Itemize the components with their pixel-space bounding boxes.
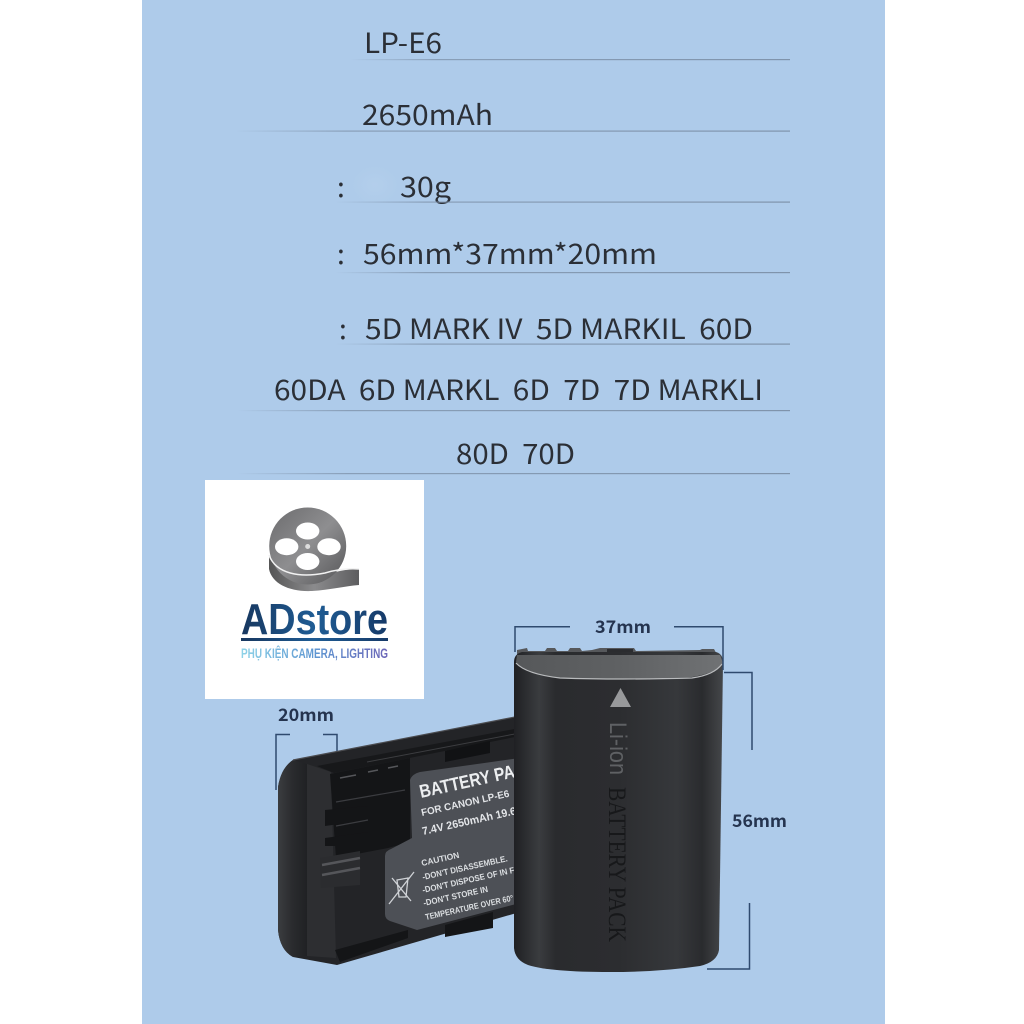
spec row: compatible cameras line 2: 60DA 6D MARKL 6D 7D 7D MARKLI xyxy=(274,369,763,409)
battery case xyxy=(278,716,520,965)
spec row: compatible cameras line 3: 80D 70D xyxy=(456,433,575,473)
spec row: weight xyxy=(335,166,790,206)
spec row: compatible cameras line 1: 5D MARK IV 5D MARKIL 60D xyxy=(365,308,753,348)
label caution text: TEMPERATURE OVER 60° xyxy=(424,893,515,922)
icon: film reel xyxy=(269,508,359,591)
embossed text: Li-ion: Li-ion xyxy=(604,722,631,775)
label caution text: -DON'T DISASSEMBLE. xyxy=(421,853,508,882)
label caution text: -DON'T DISPOSE OF IN F xyxy=(421,865,515,895)
right battery: front view xyxy=(514,648,723,972)
spec row: weight: 30g xyxy=(400,166,451,206)
dimension: 56mm: 56mm xyxy=(732,807,787,832)
spec row: dimensions: : xyxy=(337,233,345,273)
label caution text: -DON'T STORE IN xyxy=(422,884,489,908)
logo tagline: PHỤ KIỆN CAMERA, LIGHTING xyxy=(241,646,388,661)
left battery: rear view with label xyxy=(278,716,520,965)
spec row: model: LP-E6 xyxy=(364,22,442,62)
label heading: BATTERY PA xyxy=(417,760,517,802)
top latch xyxy=(445,741,490,762)
dimension: 20mm: 20mm xyxy=(278,701,334,726)
battery body xyxy=(514,652,723,972)
logo: ADstore xyxy=(205,480,424,699)
label caution text xyxy=(420,850,515,922)
dimension: 56mm xyxy=(707,672,787,969)
logo wordmark: ADstore xyxy=(241,595,388,644)
embossed text: BATTERY PACK: BATTERY PACK xyxy=(603,787,630,942)
left battery: rear view with label: 7.4V 2650mAh 19.6 xyxy=(421,805,517,838)
background panel xyxy=(142,0,885,1024)
spec row: capacity: 2650mAh xyxy=(362,94,493,134)
arrow marker xyxy=(610,688,631,707)
spec row: compatible cameras line 1: : xyxy=(339,308,347,348)
spec row: dimensions: 56mm*37mm*20mm xyxy=(363,233,657,273)
top cap xyxy=(516,655,723,679)
top contacts xyxy=(517,648,720,660)
terminals xyxy=(320,758,493,962)
gray label xyxy=(385,758,520,930)
label caution text: CAUTION xyxy=(420,850,460,868)
dimension: 37mm: 37mm xyxy=(595,613,651,638)
icon: crossed bin xyxy=(389,872,414,904)
dimension: 37mm xyxy=(515,613,723,670)
spec row: dimensions xyxy=(335,233,790,273)
dimension: 20mm xyxy=(276,701,337,790)
label model text: FOR CANON LP-E6 xyxy=(420,789,511,819)
spec row: weight: : xyxy=(337,166,345,206)
